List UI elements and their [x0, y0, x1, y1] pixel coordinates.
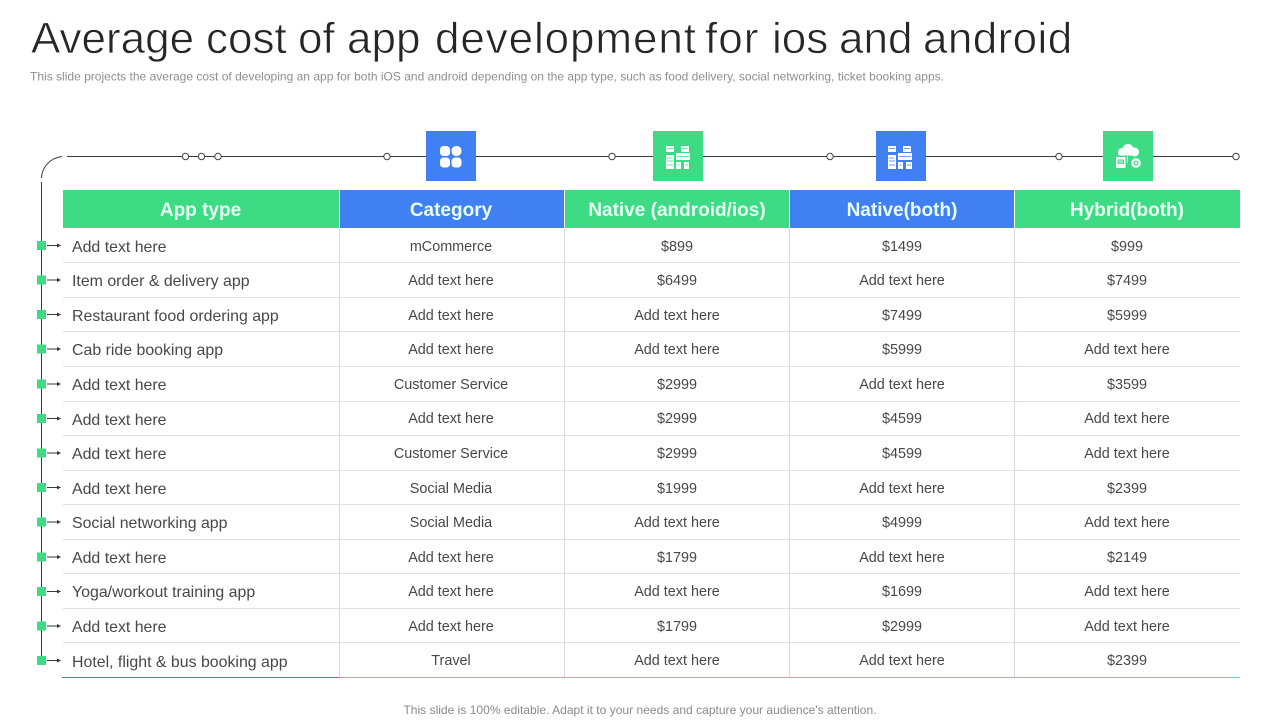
row 4: Add text here [634, 342, 720, 358]
row 9: Add text here [634, 515, 720, 531]
row 4 [72, 342, 1170, 359]
row 3: Add text here [634, 308, 720, 324]
row 7: $2999 [657, 446, 697, 462]
row 1: $999 [1111, 239, 1143, 255]
row 10 [72, 550, 1147, 567]
row 13: Hotel, flight & bus booking app [72, 654, 288, 671]
row 1: $1499 [882, 239, 922, 255]
header: Native (android/ios) [565, 190, 789, 228]
title: and [839, 14, 912, 63]
row 10: Add text here [408, 550, 494, 566]
icon: category grid [426, 131, 476, 181]
icon: native both layout [876, 131, 926, 181]
title: app [347, 14, 420, 63]
footer note: This slide is 100% editable. Adapt it to your needs and capture your audience's attention. [403, 703, 877, 717]
header: App type [63, 190, 339, 228]
row 6: Add text here [408, 411, 494, 427]
row 10: $1799 [657, 550, 697, 566]
row 11 [72, 584, 1170, 601]
row 6: Add text here [72, 412, 167, 429]
row 12: Add text here [408, 619, 494, 635]
title: android [923, 14, 1073, 63]
table rows [72, 239, 1170, 671]
row 11: Add text here [408, 584, 494, 600]
row 2: $7499 [1107, 273, 1147, 289]
icon: native android/ios layout [653, 131, 703, 181]
row 4: Add text here [408, 342, 494, 358]
row 7: Customer Service [394, 446, 508, 462]
row 6: $2999 [657, 411, 697, 427]
row 9: $4999 [882, 515, 922, 531]
row 13: Travel [431, 653, 471, 669]
row 3: $7499 [882, 308, 922, 324]
table header [63, 190, 1240, 228]
row 7: $4599 [882, 446, 922, 462]
row 5: $3599 [1107, 377, 1147, 393]
table grid lines [62, 228, 1240, 678]
row 11: Add text here [1084, 584, 1170, 600]
title: of [298, 14, 335, 63]
row 4: Add text here [1084, 342, 1170, 358]
row 7 [72, 446, 1170, 463]
title: Average [31, 14, 194, 63]
row 5: Add text here [72, 377, 167, 394]
row 4: $5999 [882, 342, 922, 358]
row 9: Social Media [410, 515, 492, 531]
row 1: mCommerce [410, 239, 492, 255]
title: for [705, 14, 759, 63]
row 13: Add text here [859, 653, 945, 669]
header: Native(both) [790, 190, 1014, 228]
row 10: Add text here [72, 550, 167, 567]
header: Hybrid(both) [1015, 190, 1240, 228]
row 3 [72, 308, 1147, 325]
row 6: Add text here [1084, 411, 1170, 427]
row 4: Cab ride booking app [72, 342, 223, 359]
row 11: $1699 [882, 584, 922, 600]
icon: hybrid cloud [1103, 131, 1153, 181]
row 3: $5999 [1107, 308, 1147, 324]
row 12: Add text here [1084, 619, 1170, 635]
row 8: Add text here [72, 481, 167, 498]
row 8 [72, 481, 1147, 498]
row 10: $2149 [1107, 550, 1147, 566]
row 10: Add text here [859, 550, 945, 566]
row 1: Add text here [72, 239, 167, 256]
row 12 [72, 619, 1170, 636]
row 9: Social networking app [72, 515, 228, 532]
row 3: Add text here [408, 308, 494, 324]
row 5: $2999 [657, 377, 697, 393]
header: Hybrid(both): Hybrid(both) [1070, 200, 1184, 221]
title: cost [206, 14, 287, 63]
row 5 [72, 377, 1147, 394]
header: Category [340, 190, 564, 228]
row 8: Social Media [410, 481, 492, 497]
row 1: $899 [661, 239, 693, 255]
header: App type: App type [160, 200, 241, 221]
row 12: $2999 [882, 619, 922, 635]
row 2: Add text here [408, 273, 494, 289]
row 2 [72, 273, 1147, 290]
row 5: Add text here [859, 377, 945, 393]
row 7: Add text here [72, 446, 167, 463]
row 7: Add text here [1084, 446, 1170, 462]
title: ios [772, 14, 828, 63]
row 6: $4599 [882, 411, 922, 427]
row 12: Add text here [72, 619, 167, 636]
subtitle: This slide projects the average cost of developing an app for both iOS and android depending on the app type, such as food delivery, social networking, ticket booking apps. [30, 70, 944, 84]
row 5: Customer Service [394, 377, 508, 393]
header: Native(both): Native(both) [847, 200, 957, 221]
timeline connector [42, 153, 1239, 660]
row 2: Item order & delivery app [72, 273, 250, 290]
row 12: $1799 [657, 619, 697, 635]
title: development [435, 14, 697, 63]
header: Native (android/ios): Native (android/ios) [588, 200, 766, 221]
row 9 [72, 515, 1170, 532]
row 8: $2399 [1107, 481, 1147, 497]
row 13 [72, 653, 1147, 671]
row 11: Add text here [634, 584, 720, 600]
row 3: Restaurant food ordering app [72, 308, 279, 325]
row markers [37, 241, 61, 665]
row 8: $1999 [657, 481, 697, 497]
row 2: $6499 [657, 273, 697, 289]
row 9: Add text here [1084, 515, 1170, 531]
row 2: Add text here [859, 273, 945, 289]
row 8: Add text here [859, 481, 945, 497]
row 13: $2399 [1107, 653, 1147, 669]
row 11: Yoga/workout training app [72, 584, 255, 601]
row 6 [72, 411, 1170, 429]
header: Category: Category [410, 200, 493, 221]
row 1 [72, 239, 1143, 256]
row 13: Add text here [634, 653, 720, 669]
